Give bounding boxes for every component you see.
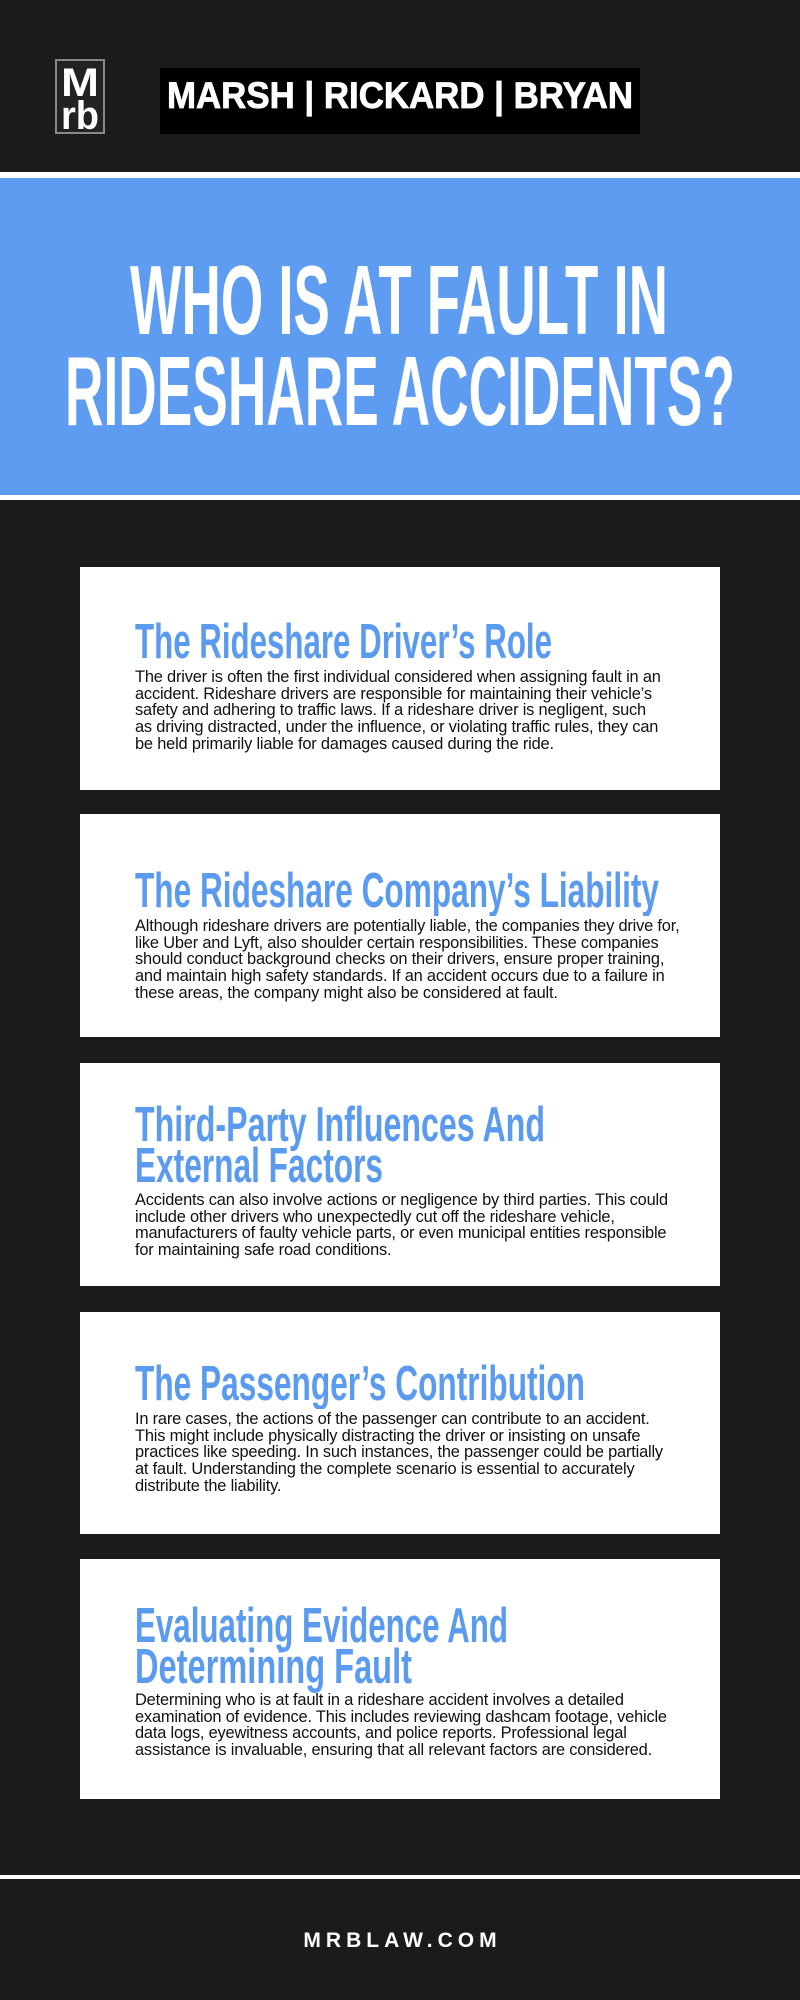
text block: practices like speeding. In such instances, the passenger could be partially <box>135 1442 663 1461</box>
panel: company liability <box>80 814 720 1037</box>
footer url: MRBLAW.COM <box>303 1929 502 1952</box>
panel: third-party <box>80 1063 720 1286</box>
panel: evidence <box>80 1559 720 1799</box>
heading: Determining Fault <box>135 1640 412 1693</box>
text block: The driver is often the first individual considered when assigning fault in an <box>135 667 661 686</box>
text block: these areas, the company might also be considered at fault. <box>135 983 558 1002</box>
text block: for maintaining safe road conditions. <box>135 1240 391 1259</box>
text block: Accidents can also involve actions or negligence by third parties. This could <box>135 1190 668 1209</box>
heading <box>135 1100 545 1192</box>
text block <box>135 1190 668 1259</box>
text block <box>135 1690 667 1759</box>
text block: Determining who is at fault in a rideshare accident involves a detailed <box>135 1690 624 1709</box>
logo mark: M <box>61 61 99 105</box>
text block: Although rideshare drivers are potentially liable, the companies they drive for, <box>135 916 679 935</box>
text block: safety and adhering to traffic laws. If a rideshare driver is negligent, such <box>135 700 646 719</box>
text block: like Uber and Lyft, also shoulder certain responsibilities. These companies <box>135 933 659 952</box>
panel: passenger <box>80 1312 720 1534</box>
text block: data logs, eyewitness accounts, and police reports. Professional legal <box>135 1723 627 1742</box>
text block: This might include physically distracting the driver or insisting on unsafe <box>135 1426 640 1445</box>
text block: accident. Rideshare drivers are responsible for maintaining their vehicle’s <box>135 684 652 703</box>
panel: driver's role <box>80 567 720 790</box>
text block: and maintain high safety standards. If an accident occurs due to a failure in <box>135 966 665 985</box>
firm name box <box>160 68 640 134</box>
text block <box>135 1409 663 1495</box>
text block: include other drivers who unexpectedly cut off the rideshare vehicle, <box>135 1207 615 1226</box>
text block <box>135 916 679 1002</box>
logo mark <box>55 59 105 134</box>
text block: In rare cases, the actions of the passenger can contribute to an accident. <box>135 1409 650 1428</box>
text block: distribute the liability. <box>135 1476 281 1495</box>
heading: External Factors <box>135 1139 383 1192</box>
text block: should conduct background checks on their drivers, ensure proper training, <box>135 949 664 968</box>
text block: at fault. Understanding the complete scenario is essential to accurately <box>135 1459 635 1478</box>
text block: be held primarily liable for damages caused during the ride. <box>135 734 554 753</box>
text block: as driving distracted, under the influence, or violating traffic rules, they can <box>135 717 658 736</box>
text block: assistance is invaluable, ensuring that all relevant factors are considered. <box>135 1740 652 1759</box>
text block: manufacturers of faulty vehicle parts, or even municipal entities responsible <box>135 1223 666 1242</box>
text block <box>135 667 661 753</box>
text block: examination of evidence. This includes reviewing dashcam footage, vehicle <box>135 1707 667 1726</box>
title band <box>0 178 800 495</box>
heading <box>135 1601 508 1693</box>
header band <box>0 0 800 172</box>
